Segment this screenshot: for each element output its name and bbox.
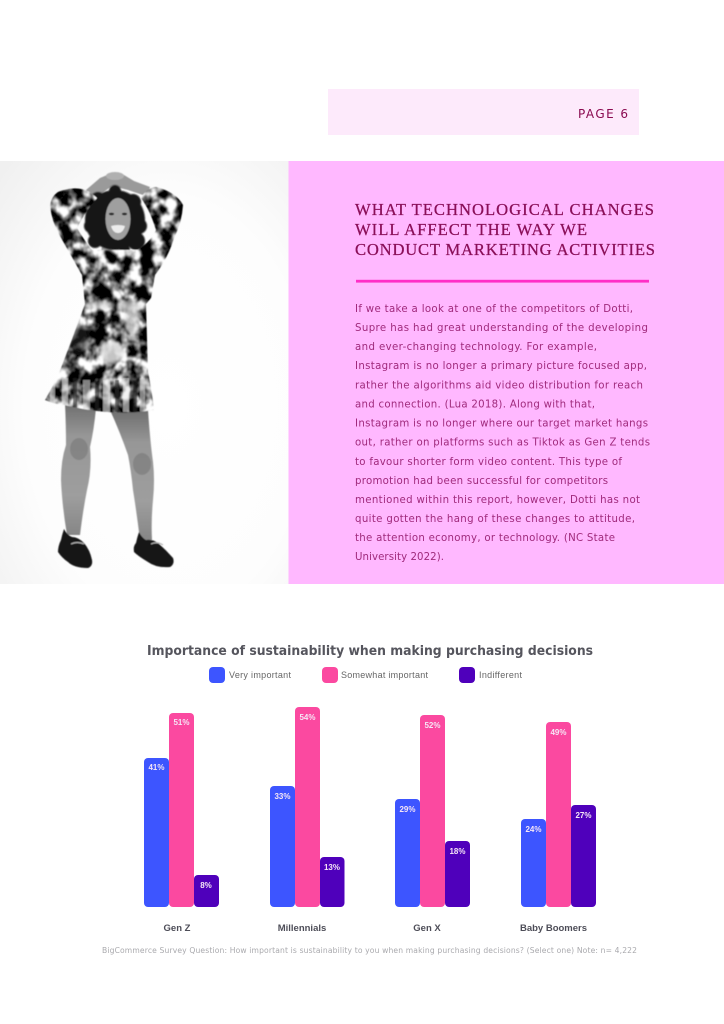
group: Millennials: 13% xyxy=(324,863,340,872)
face xyxy=(106,198,130,240)
group: Gen X xyxy=(395,715,470,934)
heading: WHAT TECHNOLOGICAL CHANGES xyxy=(355,200,654,219)
body paragraph: the attention economy, or technology. (NC State xyxy=(355,533,615,544)
body paragraph: Instagram is no longer a primary picture focused app, xyxy=(355,361,647,372)
body paragraph: and ever-changing technology. For example, xyxy=(355,342,597,353)
group: Gen Z: Gen Z xyxy=(164,923,191,934)
group: Gen X: 29% xyxy=(399,805,416,814)
body paragraph: rather the algorithms aid video distribution for reach xyxy=(355,380,643,392)
group: Gen X: 52% xyxy=(424,721,441,730)
group: Gen Z: 51% xyxy=(173,718,190,727)
group: Millennials: Millennials xyxy=(278,923,326,934)
body paragraph: Instagram is no longer where our target market hangs xyxy=(355,418,648,430)
neck xyxy=(100,240,132,273)
legs xyxy=(61,403,96,535)
group: Baby Boomers: Baby Boomers xyxy=(520,923,587,934)
photo: woman in floral dress xyxy=(0,161,289,584)
group: Gen X: 18% xyxy=(449,847,466,856)
legend: Indifferent xyxy=(479,670,522,680)
group: Baby Boomers: 27% xyxy=(575,811,592,820)
group: Millennials: 54% xyxy=(299,713,316,722)
hair xyxy=(84,185,147,255)
forearms and hands xyxy=(86,173,150,198)
group: Baby Boomers xyxy=(520,722,596,934)
page number band xyxy=(328,89,639,135)
bar chart: importance of sustainability xyxy=(102,644,637,955)
group: Gen Z: 41% xyxy=(148,763,165,772)
heading xyxy=(355,200,655,259)
body paragraph: promotion had been successful for competitors xyxy=(355,476,608,487)
source note: BigCommerce Survey Question: How important is sustainability to you when making purchasing decisions? (Select one) Note: n= 4,222 xyxy=(102,946,637,955)
body paragraph: and connection. (Lua 2018). Along with that, xyxy=(355,400,595,410)
page number: PAGE 6 xyxy=(578,107,628,121)
chart title: Importance of sustainability when making purchasing decisions xyxy=(147,644,593,659)
body paragraph xyxy=(355,304,650,563)
group: Gen X: Gen X xyxy=(413,923,441,934)
text panel xyxy=(288,161,724,584)
dress and sleeves xyxy=(44,186,184,414)
group: Millennials: 33% xyxy=(274,792,291,801)
legend xyxy=(209,667,522,683)
shoes xyxy=(58,529,92,568)
legend: Somewhat important xyxy=(341,670,428,680)
group: Baby Boomers: 24% xyxy=(525,825,542,834)
group: Baby Boomers: 49% xyxy=(550,728,567,737)
heading: CONDUCT MARKETING ACTIVITIES xyxy=(355,240,655,259)
body paragraph: quite gotten the hang of these changes to attitude, xyxy=(355,514,635,525)
body paragraph: University 2022). xyxy=(355,552,444,563)
legend: Very important xyxy=(229,670,291,680)
heading: WILL AFFECT THE WAY WE xyxy=(355,220,587,239)
group: Gen Z: 8% xyxy=(200,881,212,890)
body paragraph: Supre has had great understanding of the developing xyxy=(355,323,648,334)
body paragraph: to favour shorter form video content. This type of xyxy=(355,457,622,468)
body paragraph: mentioned within this report, however, Dotti has not xyxy=(355,495,640,506)
group: Gen Z xyxy=(144,713,219,934)
body paragraph: If we take a look at one of the competitors of Dotti, xyxy=(355,304,633,315)
group: Millennials xyxy=(270,707,344,934)
body paragraph: out, rather on platforms such as Tiktok as Gen Z tends xyxy=(355,438,650,448)
